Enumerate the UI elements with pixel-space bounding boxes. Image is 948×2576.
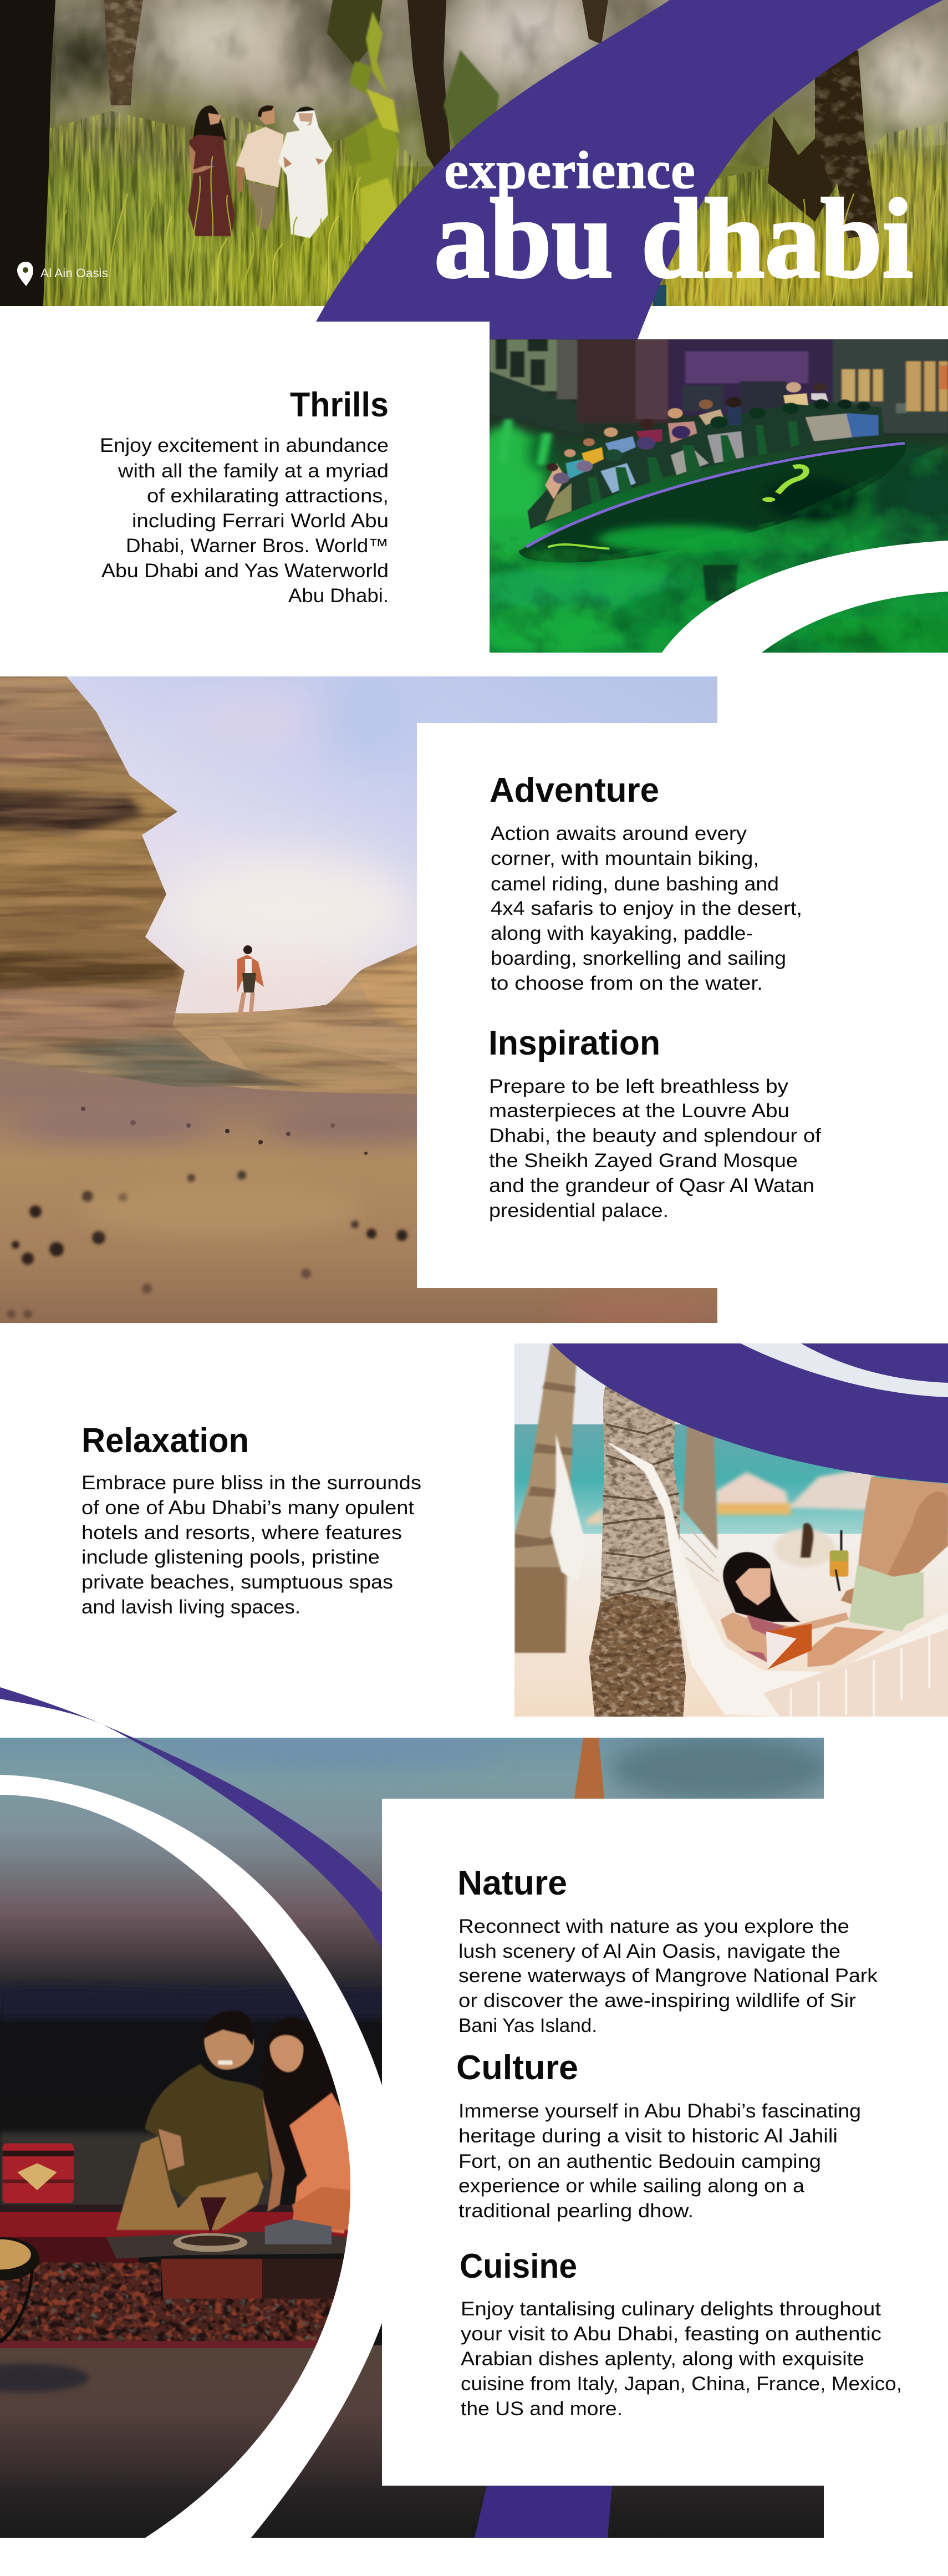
hero photo: Al Ain Oasis palm grove: [0, 0, 948, 322]
text block: adventure: [490, 771, 802, 994]
people walking: [188, 105, 332, 250]
woman in red dress: [188, 105, 235, 236]
body: relaxation copy: [81, 1472, 421, 1618]
purple swoosh curve: [0, 1687, 382, 1951]
woman standing on ridge: [237, 945, 264, 1014]
body: culture copy: traditional pearling dhow.: [458, 2200, 694, 2222]
body: relaxation copy: of one of Abu Dhabi’s many opulent: [81, 1497, 414, 1519]
man with drinks: [830, 1477, 948, 1631]
body: relaxation copy: Embrace pure bliss in the surrounds: [81, 1472, 421, 1494]
palm trunks: [0, 0, 879, 306]
mist between palms: [39, 0, 948, 166]
sand behind seating: [0, 2132, 272, 2208]
woman seated: [262, 2017, 351, 2233]
sandstone rock formation: [0, 676, 333, 1095]
spinning disc ride: [519, 440, 906, 562]
heading: adventure: Adventure: [490, 771, 659, 810]
grass over legs: [193, 156, 321, 250]
low table: [106, 2197, 351, 2298]
title: experience abu dhabi: abu dhabi: [434, 176, 913, 302]
heading: inspiration: Inspiration: [488, 1024, 660, 1062]
body: thrills copy: with all the family at a myriad: [118, 460, 389, 482]
body: cuisine copy: Enjoy tantalising culinary delights throughout: [461, 2298, 881, 2320]
body: inspiration copy: and the grandeur of Qasr Al Watan: [489, 1175, 814, 1197]
red seating: [0, 2205, 351, 2262]
body: nature copy: [458, 1916, 878, 2037]
text block: culture: [456, 2049, 861, 2222]
body: thrills copy: Abu Dhabi.: [288, 585, 389, 607]
purple swoosh band behind title: [316, 0, 943, 339]
body: nature copy: Bani Yas Island.: [458, 2015, 597, 2037]
centre palm trunk: [589, 1382, 686, 1717]
body: inspiration copy: the Sheikh Zayed Grand Mosque: [489, 1150, 798, 1172]
panel: nature photo desert camp at dusk: [0, 1735, 832, 2538]
body: adventure copy: corner, with mountain biking,: [491, 848, 759, 869]
panel: adventure photo desert rock: [0, 671, 721, 1325]
white curved band across camp photo: [0, 1775, 405, 2538]
body: thrills copy: of exhilarating attractions,: [147, 485, 389, 507]
body: relaxation copy: private beaches, sumptuous spas: [81, 1571, 393, 1593]
title: experience abu dhabi: experience: [444, 140, 695, 200]
body: nature copy: Reconnect with nature as you explore the: [458, 1916, 849, 1937]
panel: nature, culture and cuisine text card: [382, 1799, 948, 2486]
camp floor: [0, 2345, 824, 2538]
body: culture copy: Fort, on an authentic Bedouin camping: [458, 2151, 821, 2172]
heading: nature: Nature: [457, 1864, 567, 1902]
bark texture: [589, 1382, 686, 1717]
body: culture copy: [458, 2100, 861, 2222]
distant palm trunk: [683, 1424, 718, 1550]
dark dune horizon: [0, 1987, 388, 2018]
body: adventure copy: [491, 823, 802, 994]
panel: thrills photo: [451, 339, 948, 655]
text block: cuisine: [460, 2247, 902, 2420]
far sand ridge: [166, 945, 417, 1109]
fire bowl shadow: [0, 2364, 89, 2392]
grass blades: [55, 177, 940, 306]
body: inspiration copy: masterpieces at the Louvre Abu: [489, 1100, 789, 1122]
body: thrills copy: Enjoy excitement in abundance: [100, 435, 389, 456]
sky clouds: [161, 671, 416, 1015]
ride support column: [703, 565, 738, 601]
purple band below text card: [475, 2486, 612, 2538]
open book: [767, 1624, 812, 1669]
foreground sand: [0, 1053, 717, 1323]
far ridge strata: [166, 945, 417, 1109]
beach umbrellas: [587, 1467, 874, 1567]
body: inspiration copy: [489, 1076, 821, 1221]
foliage: [344, 11, 499, 255]
body: nature copy: lush scenery of Al Ain Oasis, navigate the: [458, 1941, 840, 1962]
man in cream shirt: [236, 105, 283, 230]
body: culture copy: experience or while sailing along on a: [458, 2175, 805, 2197]
body: adventure copy: to choose from on the water.: [491, 973, 763, 994]
carpet: [0, 2262, 346, 2348]
sand tone patches: [11, 1109, 721, 1325]
body: thrills copy: [100, 435, 389, 607]
purple corner arc: [801, 1343, 948, 1383]
green light beams: [498, 419, 552, 465]
distant sunbather: [801, 1523, 813, 1557]
white curved band: [662, 541, 948, 653]
body: adventure copy: Action awaits around every: [491, 823, 747, 844]
main hammock: [606, 1441, 948, 1717]
riders on the ride: [528, 382, 884, 529]
body: thrills copy: Dhabi, Warner Bros. World™: [126, 535, 389, 557]
heading: cuisine: Cuisine: [460, 2247, 577, 2285]
body: nature copy: serene waterways of Mangrove National Park: [458, 1965, 878, 1987]
body: cuisine copy: your visit to Abu Dhabi, feasting on authentic: [461, 2323, 881, 2345]
tower spire: [574, 1738, 604, 1799]
icon: location pin and caption Al Ain Oasis: [17, 262, 108, 286]
mist texture: [55, 0, 948, 166]
body: culture copy: heritage during a visit to historic Al Jahili: [458, 2125, 838, 2147]
body: adventure copy: camel riding, dune bashing and: [491, 873, 779, 895]
panel: relaxation photo beach hammock: [514, 1343, 948, 1717]
sand pebbles: [81, 1107, 368, 1155]
body: culture copy: Immerse yourself in Abu Dhabi’s fascinating: [458, 2100, 861, 2122]
man seated: [116, 2011, 268, 2230]
body: relaxation copy: hotels and resorts, where features: [81, 1522, 402, 1544]
grass texture: [33, 111, 948, 306]
body: relaxation copy: and lavish living spaces.: [81, 1596, 300, 1618]
body: relaxation copy: include glistening pools, pristine: [81, 1546, 380, 1568]
body: thrills copy: including Ferrari World Abu: [132, 510, 389, 532]
sky tone patches: [166, 1735, 832, 1802]
woman in hammock: [721, 1552, 885, 1667]
text block: thrills: [100, 386, 389, 607]
green fog: [451, 425, 948, 655]
body: adventure copy: 4x4 safaris to enjoy in the desert,: [491, 898, 802, 919]
small dark teal fragment behind title: [653, 285, 666, 306]
older man in white kandura: [278, 106, 332, 238]
body: inspiration copy: presidential palace.: [489, 1200, 669, 1221]
left hammock: [551, 1434, 587, 1581]
body: cuisine copy: [461, 2298, 902, 2420]
text block: nature: [457, 1864, 878, 2037]
body: inspiration copy: Prepare to be left breathless by: [489, 1076, 789, 1097]
text block: inspiration: [488, 1024, 821, 1221]
body: nature copy: or discover the awe-inspiring wildlife of Sir: [458, 1990, 856, 2012]
fog texture: [490, 444, 948, 653]
heading: relaxation: Relaxation: [81, 1422, 249, 1460]
body: thrills copy: Abu Dhabi and Yas Waterworld: [101, 560, 389, 582]
heading: culture: Culture: [456, 2049, 578, 2087]
body: inspiration copy: Dhabi, the beauty and splendour of: [489, 1125, 821, 1147]
building backdrop: [490, 339, 948, 435]
red cushion: [2, 2144, 74, 2203]
left palm trunk: [514, 1343, 577, 1653]
body: cuisine copy: Arabian dishes aplenty, along with exquisite: [461, 2348, 864, 2370]
text block: relaxation: [81, 1422, 421, 1618]
fire bowl: [0, 2237, 39, 2342]
body: cuisine copy: the US and more.: [461, 2398, 623, 2420]
grass mass: [11, 116, 948, 322]
body: adventure copy: along with kayaking, paddle-: [491, 923, 753, 944]
icon: location pin and caption Al Ain Oasis: Al Ain Oasis: [40, 266, 108, 280]
panel: adventure and inspiration text card: [417, 723, 717, 1288]
trunk bark texture: [104, 0, 879, 238]
body: cuisine copy: cuisine from Italy, Japan, China, France, Mexico,: [461, 2373, 902, 2395]
body: adventure copy: boarding, snorkelling and sailing: [491, 948, 786, 969]
purple arc over photo: [552, 1343, 948, 1483]
heading: thrills: Thrills: [290, 386, 389, 424]
